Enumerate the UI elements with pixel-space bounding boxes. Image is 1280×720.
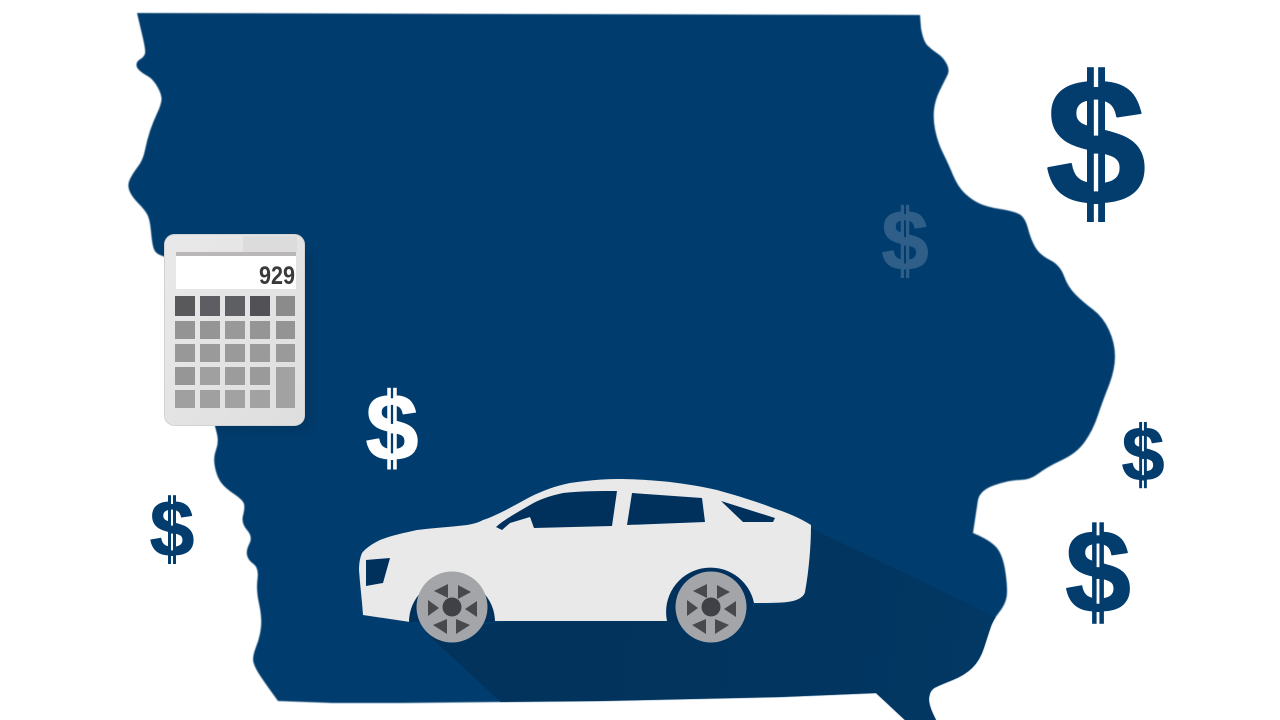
icon: faded dollar sign on map: $ bbox=[881, 194, 929, 289]
icon: medium dollar sign lower right: $ bbox=[1065, 506, 1131, 638]
front wheel bbox=[409, 572, 495, 642]
car body bbox=[359, 479, 811, 622]
rear wheel bbox=[666, 568, 754, 642]
icon: white dollar sign on map: $ bbox=[366, 375, 418, 481]
icon: small dollar sign right: $ bbox=[1122, 412, 1164, 497]
car windows bbox=[366, 491, 775, 586]
icon: calculator bbox=[164, 234, 304, 426]
calculator keys bbox=[175, 296, 295, 408]
icon: car bbox=[359, 479, 811, 642]
long car shadow bbox=[425, 528, 1012, 720]
calculator display: 929 bbox=[259, 262, 295, 290]
icon: dollar sign lower left: $ bbox=[150, 484, 194, 573]
calculator display bbox=[176, 236, 297, 290]
calculator shadow bbox=[215, 257, 309, 434]
icon: large dollar sign top right: $ bbox=[1046, 42, 1146, 243]
